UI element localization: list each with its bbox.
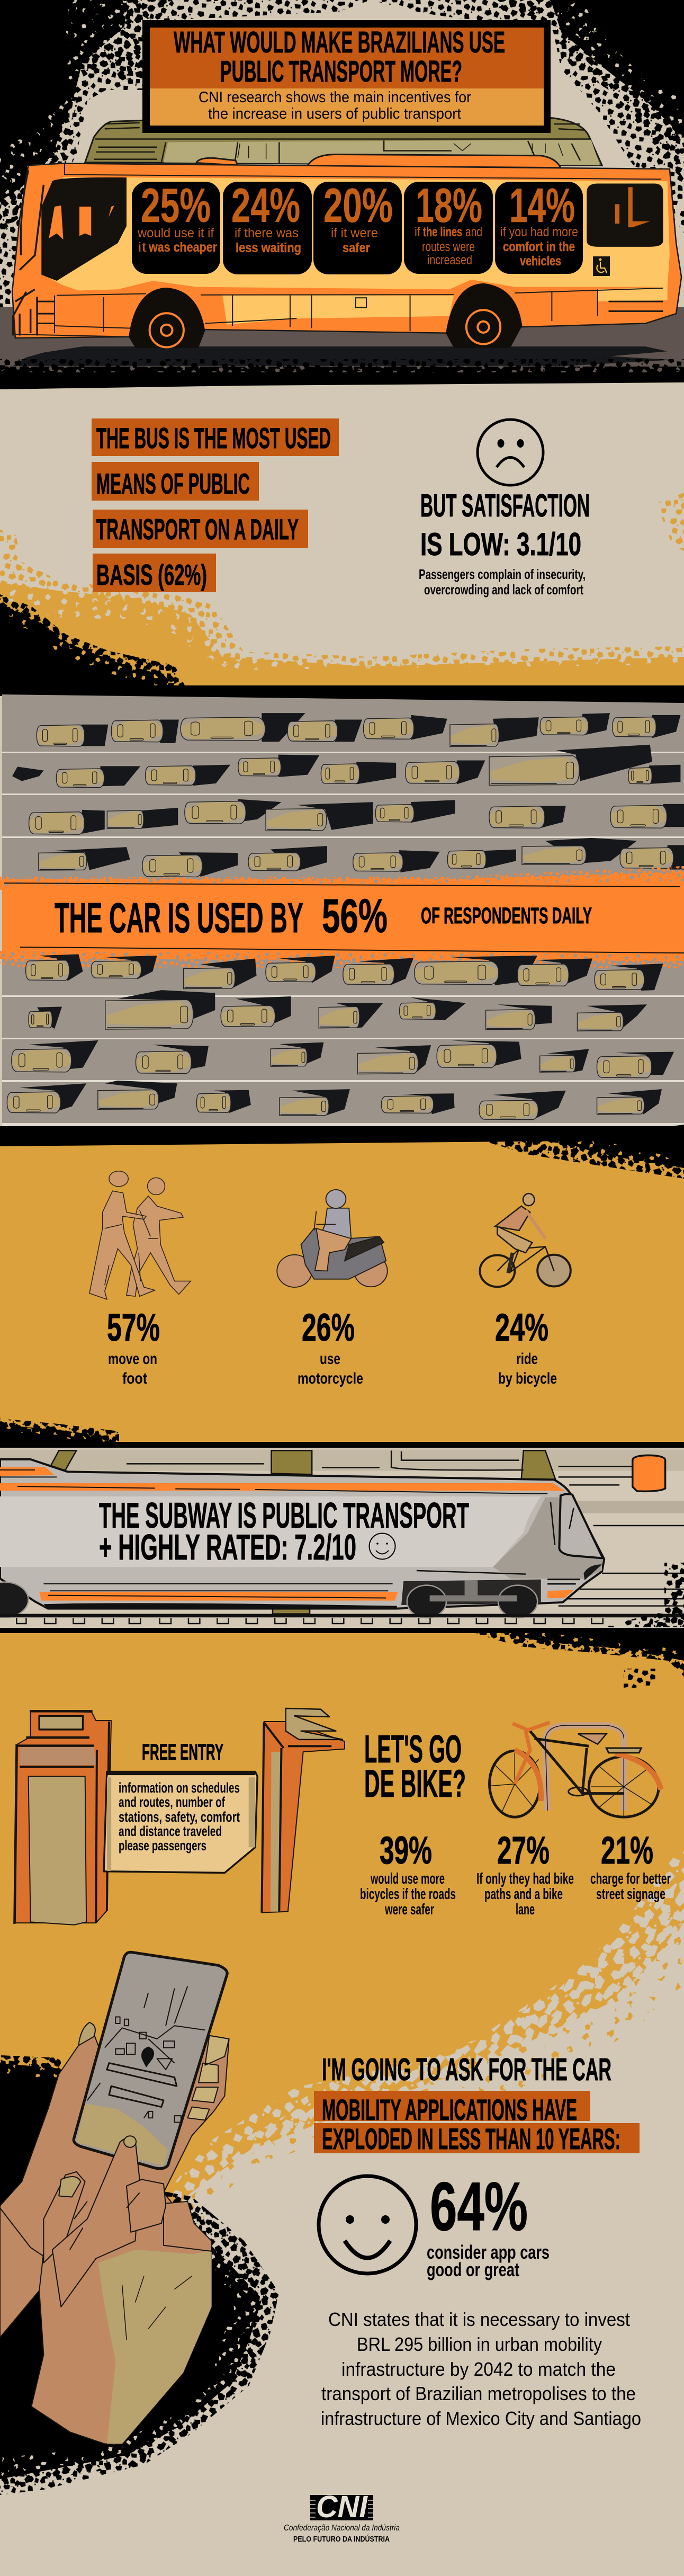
subway headline: + HIGHLY RATED: 7.2/10 [99,1527,356,1567]
stat: 39% [360,1829,456,1918]
subway headline [99,1495,469,1567]
black grunge right of and below train [474,1563,684,1688]
stat: 21%: 21% [601,1829,653,1872]
heading [174,25,505,88]
stat: 27%: paths and a bike [484,1886,563,1903]
stat: 27%: lane [516,1901,535,1918]
section: bicycle [360,1723,671,1918]
road under bus [0,307,684,373]
illustration: hand holding phone [0,1952,229,2444]
black grunge texture behind bus [0,0,684,360]
stat: 57% on foot [107,1306,160,1387]
section: bus usage and satisfaction [0,418,684,705]
icon: motorcycle rider [277,1190,388,1287]
stat card: 18% [404,179,493,274]
icon: walking couple [89,1171,191,1299]
bar heading: bus is most used: MEANS OF PUBLIC [96,467,250,500]
band headline: 56% [322,890,388,943]
section: subway [0,1419,684,1688]
investment paragraph [321,2308,641,2429]
black grunge corner [0,594,185,687]
stat card: 25%: was cheaper [148,240,217,255]
heading: let's go de bike: LET'S GO [364,1728,462,1771]
stat card: 25% [132,179,220,274]
stat: 24% bicycle: 24% [495,1306,548,1349]
black bar [0,685,684,705]
stat: 24% bicycle [495,1306,557,1387]
band headline: THE CAR IS USED BY [55,894,303,941]
bar heading: bus is most used [92,418,339,592]
stat card: 20%: safer [343,240,370,255]
logo: CNI [284,2490,400,2544]
stat: 57% on foot: 57% [107,1306,160,1349]
icon: small smiley [370,1533,395,1559]
stat card: 18%: routes were [422,239,475,254]
subtitle: the increase in users of public transport [208,105,461,122]
logo: CNI: PELO FUTURO DA INDÚSTRIA [293,2534,390,2544]
cars below the band [7,954,674,1120]
free entry sign text: and distance traveled [119,1823,222,1839]
stat: 27% [476,1829,574,1918]
satisfaction note [419,566,586,598]
stat: 39%: were safer [384,1901,434,1918]
title box [142,20,551,133]
heading: PUBLIC TRANSPORT MORE? [220,55,462,88]
bar heading: bus is most used: THE BUS IS THE MOST USED [96,422,331,454]
ground grunge edge [0,359,684,389]
stat: 21% [590,1829,671,1903]
investment paragraph: infrastructure by 2042 to match the [341,2358,616,2380]
stat: 26% motorcycle: use [320,1350,340,1368]
satisfaction score [420,488,590,562]
satisfaction score: IS LOW: 3.1/10 [420,527,581,562]
stat: 39%: would use more [370,1870,445,1887]
stat card: 14%: comfort in the [503,239,575,254]
stat: 39%: bicycles if the roads [360,1886,456,1903]
orange band [0,866,684,968]
investment paragraph: BRL 295 billion in urban mobility [357,2333,602,2355]
stat card: 20%: 20% [323,179,393,233]
illustration: orange bus [12,118,681,366]
illustration: subway train [0,1448,684,1628]
free entry sign text: information on schedules [119,1780,240,1796]
subtitle: CNI research shows the main incentives for [199,89,471,106]
section: ride-hailing apps [0,1952,641,2495]
stat card: 18%: increased [427,253,472,268]
black grunge above train [0,1419,119,1443]
stat: 57% on foot: foot [122,1370,147,1387]
black rails frame [0,1442,684,1633]
investment paragraph: infrastructure of Mexico City and Santiago [321,2408,641,2429]
investment paragraph: CNI states that it is necessary to invest [328,2308,630,2330]
illustration: turnstile gates [14,1708,345,1925]
yellow background [0,1134,684,2278]
stat: 64%: consider app cars [427,2241,550,2263]
stat card: 24% [223,179,312,274]
stat: 24% bicycle: by bicycle [498,1370,557,1387]
yellow paint texture [0,493,684,687]
stat card: 24%: if there was [235,226,299,240]
section: bus hero [0,0,684,389]
free entry sign text [119,1780,240,1853]
road surface [2,694,684,1125]
free entry sign text: and routes, number of [119,1794,226,1810]
bus shadow streaks [13,346,672,366]
logo: CNI: Confederação Nacional da Indústria [284,2524,400,2533]
stat: 64%: 64% [430,2168,528,2245]
section: free entry gates [14,1708,345,1925]
stat card: 18%: if [415,225,420,239]
stat: 57% on foot: move on [108,1350,157,1368]
stat card: 25%: 25% [141,179,211,233]
section: other modes [0,1125,684,2576]
icon: bicycle at rack [490,1723,661,1817]
stat card: 24%: less waiting [236,240,301,255]
icon: wheelchair [593,256,610,276]
logo: CNI: CNI [316,2490,368,2524]
icon: large smiley [319,2176,416,2274]
stat: 27%: 27% [497,1829,550,1872]
black bar [0,1125,684,1146]
satisfaction note: overcrowding and lack of comfort [424,582,583,598]
black grunge corner [476,1139,684,1179]
free entry sign text: please passengers [119,1838,206,1853]
stat card: 20% [313,179,402,274]
stat card: 14%: vehicles [520,254,561,269]
free entry heading: FREE ENTRY [142,1740,223,1765]
free entry sign text: stations, safety, comfort [119,1809,240,1825]
section: car traffic [0,694,684,1126]
stat card: 14% [495,179,583,274]
stat: 26% motorcycle: motorcycle [298,1370,363,1387]
cars above the band [12,713,684,877]
stat card: 20%: if it were [331,226,378,240]
icon: cyclist [480,1193,571,1287]
heading: let's go de bike [364,1728,466,1805]
stat: 27%: If only they had bike [476,1870,574,1887]
stat: 64%: good or great [427,2259,519,2280]
black grunge behind hand [0,2055,279,2495]
stat: 39%: 39% [380,1829,432,1872]
bar heading: mobility applications [314,2091,640,2155]
stat: 64% [427,2168,550,2280]
stat card: 25%: would use it if [137,226,214,240]
beige paint texture [0,1843,684,2576]
stat card: 18%: and [465,225,482,239]
heading: let's go de bike: DE BIKE? [364,1762,466,1805]
stat card: 14%: if you had more [500,225,578,239]
stat card: 18%: the lines [423,225,462,239]
stat: 26% motorcycle: 26% [302,1306,355,1349]
icon: sad face [478,420,543,485]
stat card: 14%: 14% [509,179,575,233]
subtitle [199,89,471,122]
stat: 26% motorcycle [298,1306,363,1387]
stat: 24% bicycle: ride [516,1350,538,1368]
bar heading: bus is most used: BASIS (62%) [96,558,207,591]
stat card: 24%: 24% [231,179,300,233]
satisfaction note: Passengers complain of insecurity, [419,566,586,582]
investment paragraph: transport of Brazilian metropolises to the [321,2383,636,2404]
stat card: 25%: it [138,240,147,255]
bar heading: bus is most used: TRANSPORT ON A DAILY [96,513,299,546]
stat card: 18%: 18% [416,179,482,233]
